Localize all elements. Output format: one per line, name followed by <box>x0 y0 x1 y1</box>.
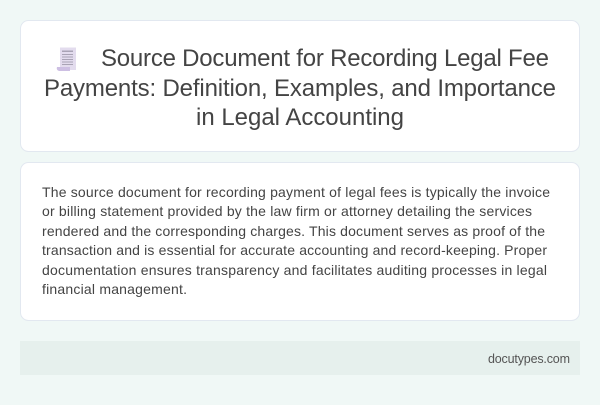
description text: documentation ensures transparency and facilitates auditing processes in legal <box>42 262 547 278</box>
panel: title card <box>20 20 580 152</box>
title: Source Document for Recording Legal Fee <box>101 45 549 72</box>
title: in Legal Accounting <box>196 104 404 131</box>
icon: document scroll <box>57 48 76 71</box>
footer bar <box>20 341 580 375</box>
description text: or billing statement provided by the law firm or attorney detailing the services <box>42 203 532 219</box>
title: Payments: Definition, Examples, and Importance <box>44 75 556 102</box>
title <box>44 45 556 131</box>
description text: The source document for recording payment of legal fees is typically the invoice <box>42 184 550 200</box>
description text: rendered and the corresponding charges. This document serves as proof of the <box>42 223 545 239</box>
description text: transaction and is essential for accurate accounting and record-keeping. Proper <box>42 242 547 258</box>
panel: description card <box>20 162 580 320</box>
footer source label: docutypes.com <box>488 352 570 366</box>
description text <box>42 184 550 297</box>
description text: financial management. <box>42 281 187 297</box>
